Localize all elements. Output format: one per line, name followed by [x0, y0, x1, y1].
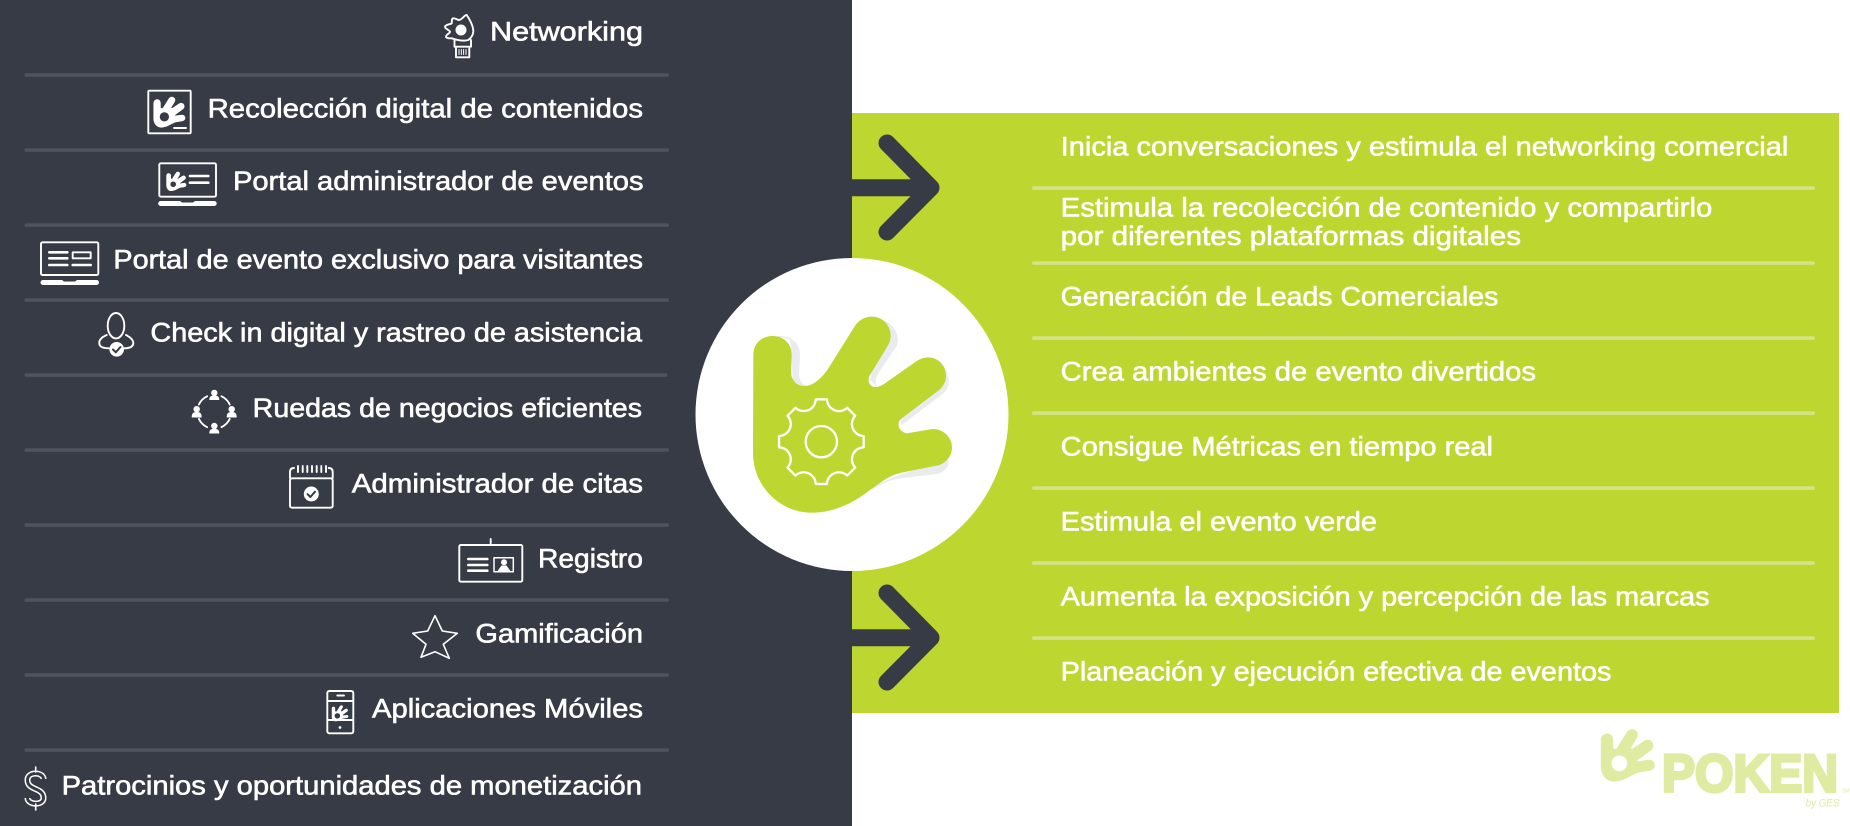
row: Portal administrador de eventos — [158, 163, 643, 206]
benefit 4: Crea ambientes de evento divertidos — [1061, 357, 1536, 387]
benefit 3: Generación de Leads Comerciales — [1061, 282, 1498, 312]
icon: hand tag — [148, 91, 191, 133]
icon: laptop with hand — [158, 163, 217, 206]
label: Portal administrador de eventos: Portal administrador de eventos — [233, 166, 644, 196]
icon: id badge — [459, 539, 522, 582]
benefit 5: Consigue Métricas en tiempo real — [1061, 432, 1493, 462]
benefit 1: Inicia conversaciones y estimula el networking comercial — [1061, 132, 1788, 162]
icon: hand with gear — [753, 317, 952, 513]
label: Networking: Networking — [490, 17, 643, 47]
label: Check in digital y rastreo de asistencia: Check in digital y rastreo de asistencia — [150, 318, 643, 348]
logo by GES: by GES — [1806, 798, 1840, 810]
label: Recolección digital de contenidos: Recolección digital de contenidos — [208, 94, 643, 124]
label: Administrador de citas: Administrador de citas — [352, 468, 643, 498]
row: Portal de evento exclusivo para visitantes — [40, 242, 643, 285]
row: Patrocinios y oportunidades de monetización — [28, 767, 642, 810]
benefit 2: Estimula la recolección de contenido y compartirlo — [1061, 193, 1712, 223]
icon: user check — [99, 313, 133, 357]
benefit 8: Planeación y ejecución efectiva de eventos — [1061, 657, 1611, 687]
icon: laptop with page — [40, 242, 99, 285]
arrow: top — [852, 143, 931, 232]
row: Gamificación — [413, 616, 643, 658]
benefits list — [1061, 132, 1788, 687]
label: Registro: Registro — [538, 544, 643, 574]
row: Networking — [445, 15, 643, 57]
benefit 2: por diferentes plataformas digitales — [1061, 221, 1521, 251]
icon: hand usb — [445, 15, 473, 57]
row: Administrador de citas — [290, 466, 643, 508]
icon: calendar — [290, 466, 333, 508]
benefit 6: Estimula el evento verde — [1061, 507, 1377, 537]
label: Ruedas de negocios eficientes: Ruedas de negocios eficientes — [253, 393, 642, 423]
panel: features (dark) — [0, 0, 852, 826]
label: Patrocinios y oportunidades de monetización: Patrocinios y oportunidades de monetización — [62, 770, 642, 800]
arrow: bottom — [852, 593, 931, 682]
row: Check in digital y rastreo de asistencia — [99, 313, 643, 357]
icon: mobile phone — [327, 691, 353, 733]
logo hand — [1602, 730, 1654, 781]
label: Aplicaciones Móviles: Aplicaciones Móviles — [372, 694, 643, 724]
logo: Poken by GES — [1602, 730, 1850, 810]
label: Portal de evento exclusivo para visitantes: Portal de evento exclusivo para visitantes — [113, 244, 643, 274]
row: Recolección digital de contenidos — [148, 91, 643, 133]
row: Ruedas de negocios eficientes — [192, 390, 642, 434]
logo sm mark: SM — [1842, 789, 1850, 795]
benefit 7: Aumenta la exposición y percepción de las marcas — [1061, 582, 1710, 612]
benefit 2 — [1061, 193, 1712, 251]
panel: benefits (green) — [852, 113, 1839, 713]
row: Registro — [459, 539, 643, 582]
row: Aplicaciones Móviles — [327, 691, 643, 733]
icon: people circle — [192, 390, 237, 434]
icon: dollar sign — [28, 767, 44, 810]
label: Gamificación: Gamificación — [475, 618, 643, 648]
logo wordmark: POKEN — [1662, 745, 1838, 804]
center circle — [696, 258, 1008, 571]
icon: star — [413, 616, 457, 658]
